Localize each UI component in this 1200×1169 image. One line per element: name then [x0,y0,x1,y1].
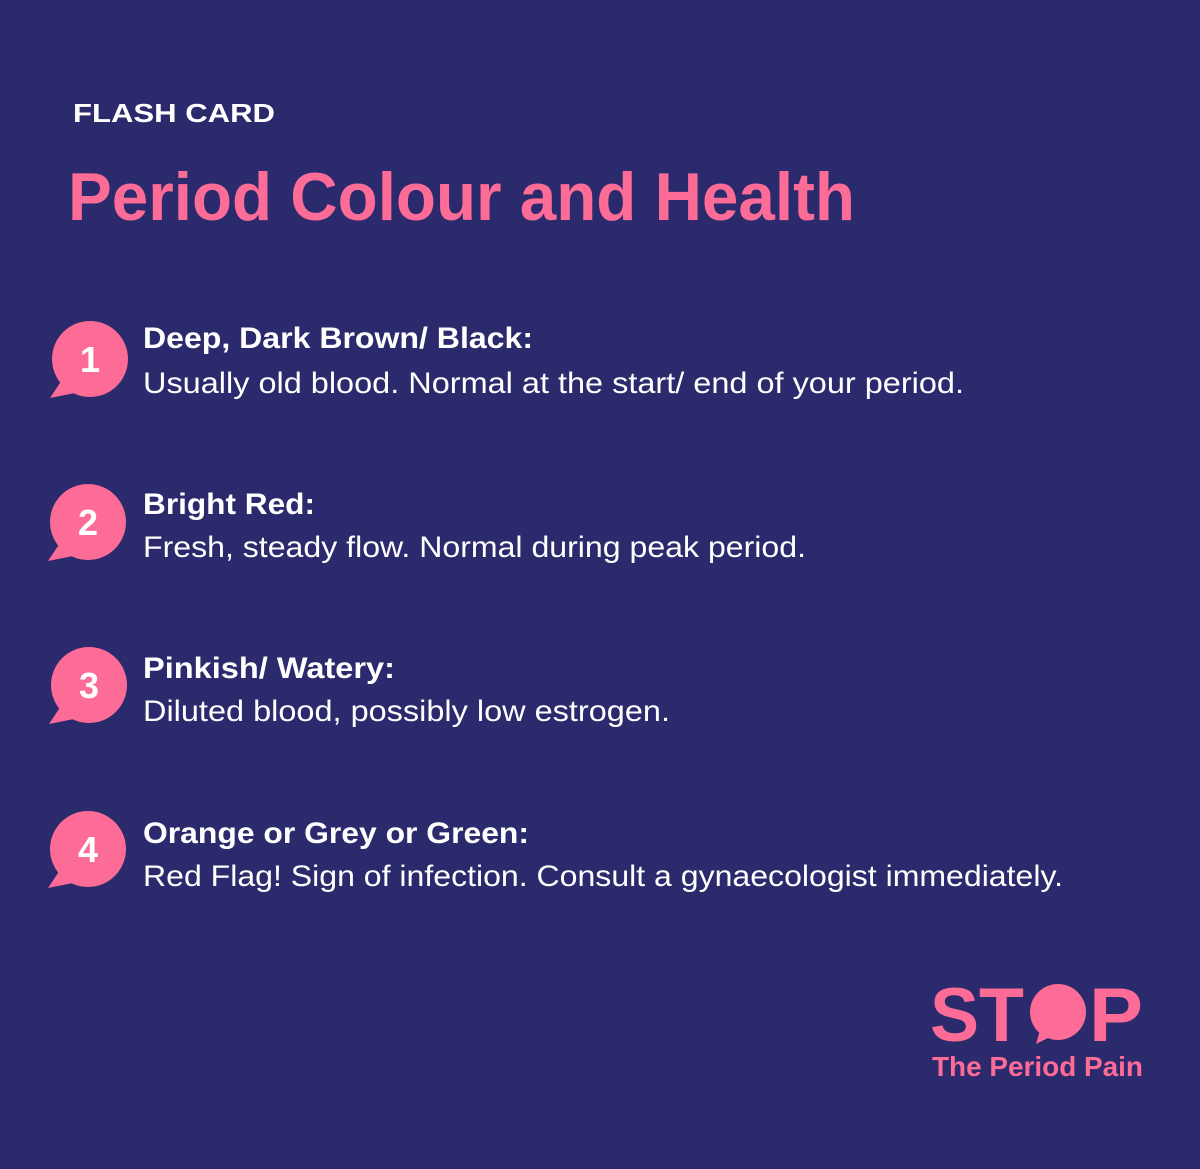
logo [930,973,1143,1082]
item 3 text: Diluted blood, possibly low estrogen. [143,695,670,728]
label: flash card: FLASH CARD [73,98,275,128]
logo: The Period Pain [932,1051,1143,1082]
icon: bubble 2: 2 [78,502,98,543]
item 1 [50,321,964,400]
item 4 text: Red Flag! Sign of infection. Consult a gynaecologist immediately. [143,860,1063,893]
item 2 title: Bright Red: [143,488,315,521]
item 1 text: Usually old blood. Normal at the start/ end of your period. [143,367,964,400]
icon: bubble 3: 3 [79,665,99,706]
icon: bubble 4 [48,811,126,888]
icon: bubble 4: 4 [78,829,98,870]
item 4 [48,811,1063,893]
item 1 title: Deep, Dark Brown/ Black: [143,322,533,355]
item 3 [49,647,670,728]
icon: bubble 2 [48,484,126,561]
logo: P [1089,973,1143,1058]
item 2 text: Fresh, steady flow. Normal during peak period. [143,531,806,564]
icon: bubble 1 [50,321,128,398]
title: Period Colour and Health [68,159,855,235]
item 2 [48,484,806,564]
logo: ST [930,973,1024,1058]
icon: bubble 1: 1 [80,339,100,380]
icon: bubble 3 [49,647,127,724]
item 4 title: Orange or Grey or Green: [143,817,529,850]
item 3 title: Pinkish/ Watery: [143,652,395,685]
